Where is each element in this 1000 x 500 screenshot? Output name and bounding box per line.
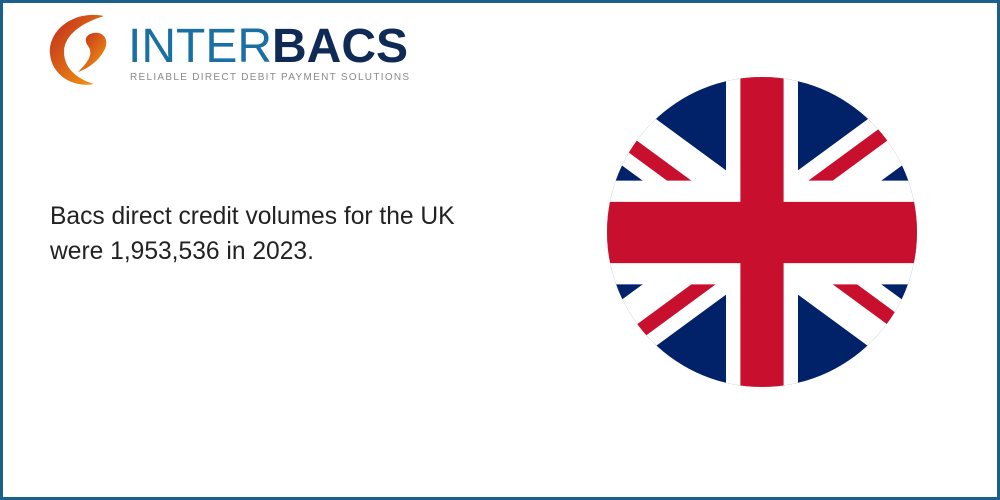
- brand name: INTERBACS: [128, 20, 408, 73]
- text block: statistic: were 1,953,536 in 2023.: [50, 238, 314, 265]
- icon: phoenix swoosh: [50, 14, 106, 85]
- icon: UK flag circle: [607, 77, 917, 387]
- text block: statistic: Bacs direct credit volumes for the UK: [50, 203, 455, 230]
- tagline: RELIABLE DIRECT DEBIT PAYMENT SOLUTIONS: [130, 72, 410, 83]
- logo: [50, 14, 410, 85]
- text block: statistic: [50, 203, 455, 265]
